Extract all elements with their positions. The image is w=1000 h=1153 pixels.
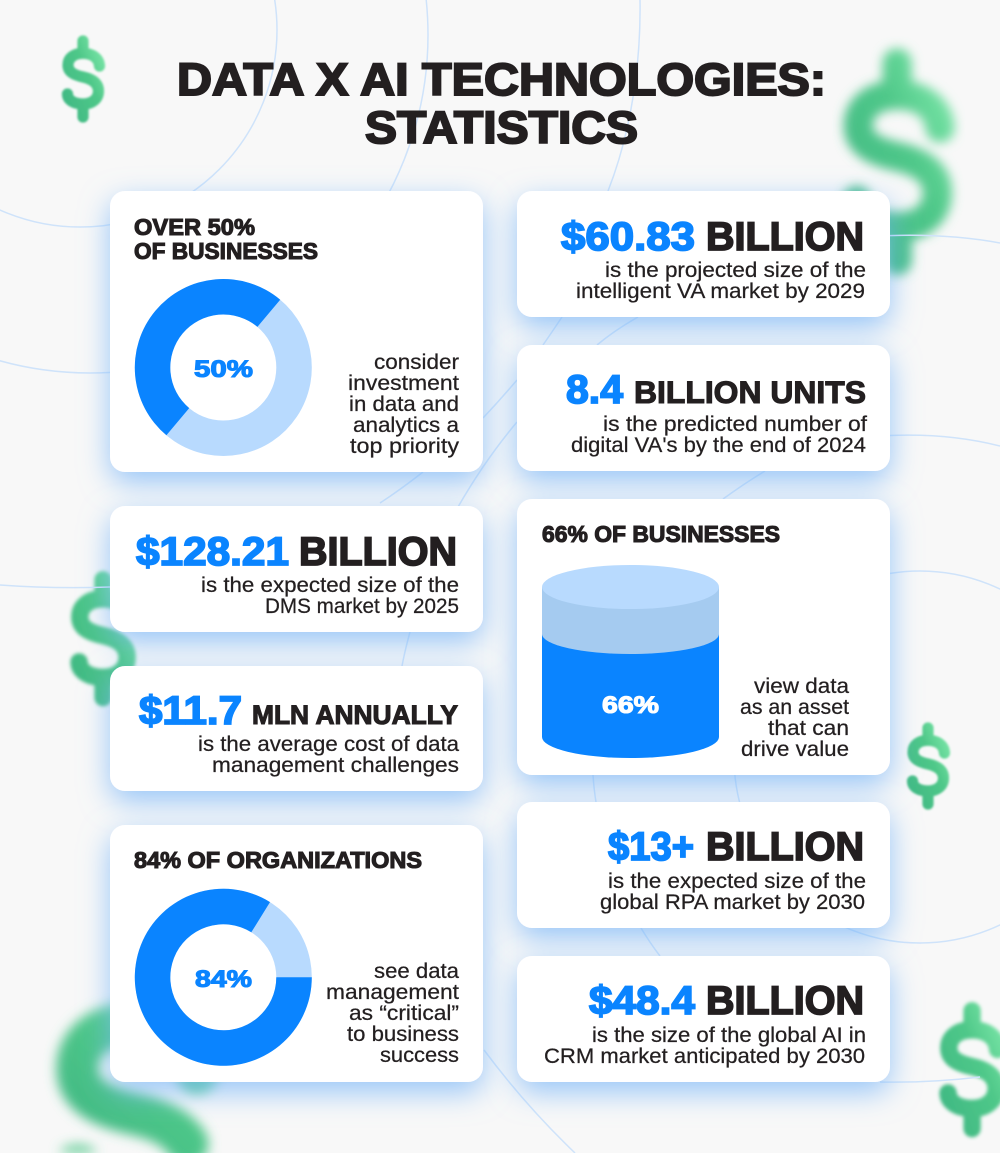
text: see data management: as “critical” xyxy=(349,1001,459,1025)
stat: $60.83 billion: $60.83 xyxy=(561,215,695,259)
donut chart: 50%: 50% xyxy=(194,356,253,383)
stat: 8.4 billion units: 8.4 xyxy=(566,368,624,412)
stat: $128.21 billion xyxy=(136,530,457,574)
donut chart: 84% xyxy=(135,889,312,1066)
stat: $11.7 mln annually xyxy=(139,689,458,733)
heading: over 50% of businesses xyxy=(134,214,318,264)
text: digital VAs: is the predicted number of xyxy=(603,412,867,436)
text: see data management: management xyxy=(326,980,459,1004)
stat: $128.21 billion: $128.21 xyxy=(136,530,289,574)
panel: $128.21 billion xyxy=(110,506,483,632)
text: view data as an asset: that can xyxy=(768,716,849,740)
text: see data management: success xyxy=(380,1043,459,1067)
stat: 8.4 billion units: BILLION UNITS xyxy=(634,374,866,410)
stat: $128.21 billion: BILLION xyxy=(299,530,457,574)
panel: $60.83 billion xyxy=(517,191,890,317)
text: DMS market: DMS market by 2025 xyxy=(265,594,459,618)
stat: $60.83 billion: BILLION xyxy=(706,215,864,259)
stat: $48.4 billion: $48.4 xyxy=(589,979,696,1023)
text: digital VAs xyxy=(571,412,867,457)
donut chart: 84%: 84% xyxy=(195,966,252,993)
text: consider investment: consider xyxy=(374,350,459,374)
text: global AI in CRM market: CRM market anticipated by 2030 xyxy=(544,1044,865,1068)
text: global AI in CRM market: is the size of the global AI in xyxy=(592,1023,866,1047)
stat: $13+ billion: $13+ xyxy=(608,825,694,869)
text: DMS market: is the expected size of the xyxy=(201,573,459,597)
text: digital VAs: digital VA's by the end of 2024 xyxy=(571,433,866,457)
panel: $48.4 billion xyxy=(517,956,890,1082)
icon: blurred dollar middle right xyxy=(912,728,944,804)
text: view data as an asset: drive value xyxy=(741,737,849,761)
cylinder chart: 66% xyxy=(542,565,719,758)
heading: 66% of businesses: 66% OF BUSINESSES xyxy=(542,521,780,547)
icon: blurred dollar top right xyxy=(857,63,940,261)
text: global AI in CRM market xyxy=(544,1023,866,1068)
panel: 66% of businesses xyxy=(517,499,890,775)
icon: blurred dollar bottom left xyxy=(60,1024,197,1153)
heading: 84% of organizations: 84% OF ORGANIZATIONS xyxy=(134,847,422,873)
text: data management challenges xyxy=(198,732,459,777)
text: see data management: see data xyxy=(374,959,459,983)
text: consider investment: top priority xyxy=(350,434,459,458)
text: see data management: to business xyxy=(347,1022,459,1046)
text: intelligent VA market xyxy=(576,258,866,303)
stat: $48.4 billion: BILLION xyxy=(706,979,864,1023)
stat: $13+ billion: BILLION xyxy=(706,825,864,869)
stat: $11.7 mln annually: MLN ANNUALLY xyxy=(252,700,458,730)
cylinder chart: 66%: 66% xyxy=(602,692,659,719)
panel: over 50% of businesses xyxy=(110,191,483,472)
text: data management challenges: management challenges xyxy=(212,753,459,777)
stat: $13+ billion xyxy=(608,825,864,869)
text: DMS market xyxy=(201,573,459,618)
title xyxy=(177,54,826,153)
donut chart: 50% xyxy=(135,279,312,456)
text: consider investment: analytics a xyxy=(353,413,459,437)
stat: 8.4 billion units xyxy=(566,368,866,412)
stat: $60.83 billion xyxy=(561,215,864,259)
panel: $13+ billion xyxy=(517,802,890,928)
panel: $11.7 mln annually xyxy=(110,666,483,791)
icon: blurred dollar bottom right xyxy=(948,1011,998,1129)
panel: 84% of organizations xyxy=(110,825,483,1082)
text: global RPA market xyxy=(600,869,866,914)
stat: $48.4 billion xyxy=(589,979,864,1023)
title: DATA X AI TECHNOLOGIES: xyxy=(177,54,826,105)
stat: $11.7 mln annually: $11.7 xyxy=(139,689,242,733)
text: intelligent VA market: is the projected size of the xyxy=(605,258,866,282)
title: STATISTICS xyxy=(365,102,638,153)
text: consider investment: investment xyxy=(348,371,459,395)
text: consider investment: in data and xyxy=(349,392,459,416)
heading: over 50% of businesses: OF BUSINESSES xyxy=(134,238,318,264)
icon: blurred dollar top left xyxy=(68,41,100,117)
text: view data as an asset: view data xyxy=(754,674,849,698)
icon: blurred dollar middle left xyxy=(79,580,129,698)
text: global RPA market: is the expected size of the xyxy=(608,869,866,893)
text: global RPA market: global RPA market by 2030 xyxy=(600,890,865,914)
text: view data as an asset xyxy=(740,674,849,761)
text: data management challenges: is the average cost of data xyxy=(198,732,459,756)
text: intelligent VA market: intelligent VA market by 2029 xyxy=(576,279,865,303)
text: see data management xyxy=(326,959,459,1067)
text: consider investment xyxy=(348,350,459,458)
text: view data as an asset: as an asset xyxy=(740,695,849,719)
heading: over 50% of businesses: OVER 50% xyxy=(134,214,255,240)
panel: 8.4 billion units xyxy=(517,345,890,471)
